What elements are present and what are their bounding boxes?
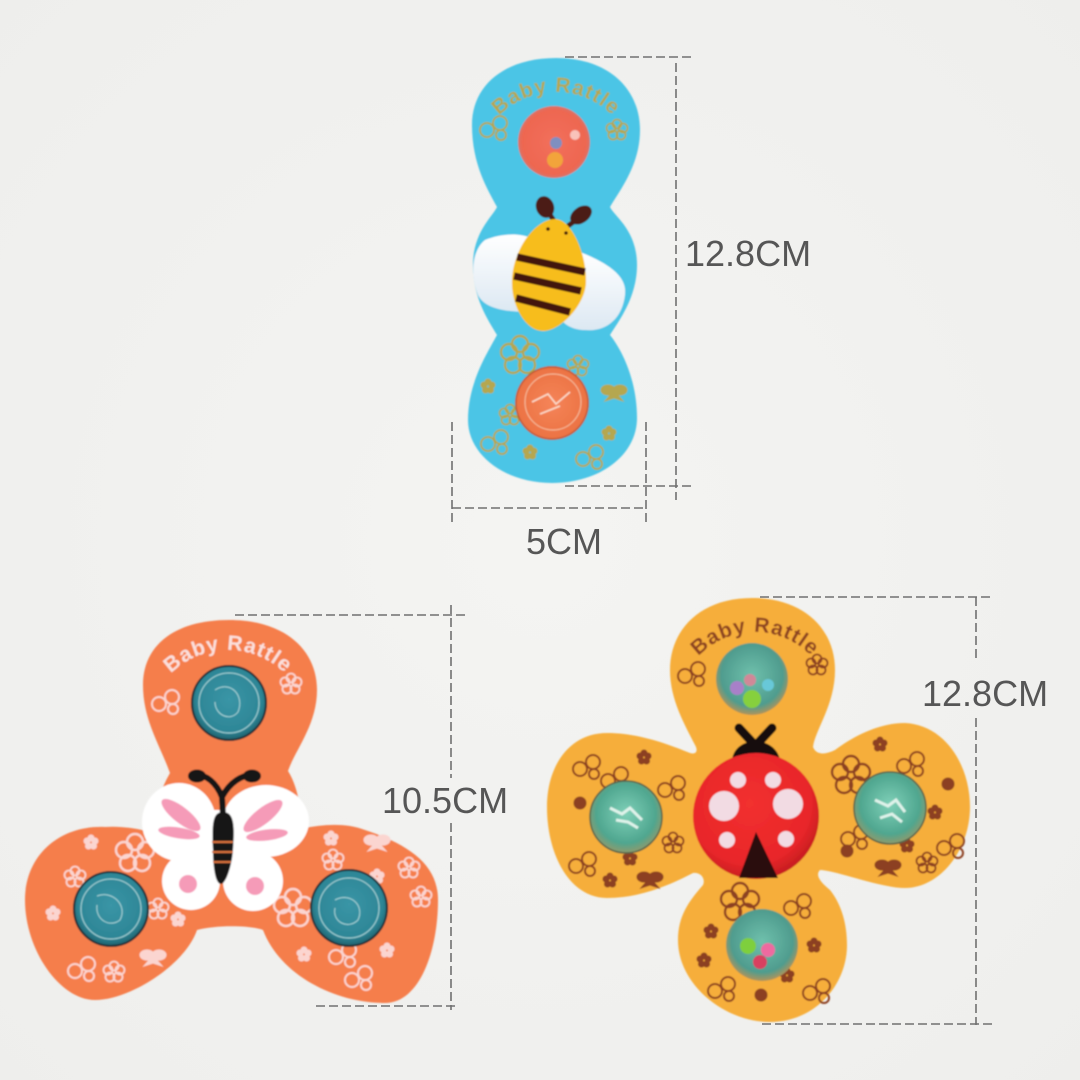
icon: butterfly <box>142 770 309 911</box>
capsule left teal <box>74 872 148 946</box>
dimension: blue height 12.8CM <box>565 57 811 500</box>
dimension: orange height 10.5CM <box>235 605 508 1010</box>
capsule bottom orange <box>515 366 589 440</box>
toy: yellow ladybug spinner <box>546 596 971 1023</box>
pattern: yellow toy flowers <box>569 654 964 1003</box>
capsule top teal <box>192 666 266 740</box>
label: 12.8CM <box>922 673 1048 714</box>
toy: blue bee spinner <box>467 57 641 484</box>
icon: ladybug <box>693 728 819 879</box>
pattern: orange toy flowers <box>46 674 432 990</box>
capsule right teal <box>311 870 387 946</box>
capsule bottom with beads <box>726 909 798 981</box>
icon: bee <box>512 194 595 331</box>
spinner body yellow <box>547 598 970 1022</box>
toy: orange butterfly spinner <box>24 619 439 1004</box>
brand text: Baby Rattle <box>162 634 290 674</box>
spinner body blue <box>468 58 640 483</box>
brand text: Baby Rattle <box>490 76 618 116</box>
pattern: blue toy flowers <box>480 116 628 469</box>
label: 5CM <box>526 521 602 562</box>
label: 12.8CM <box>685 233 811 274</box>
capsule right mint <box>854 772 926 844</box>
capsule top with beads <box>716 643 788 715</box>
capsule left mint <box>590 781 662 853</box>
spinner body orange <box>25 620 438 1003</box>
dimension: yellow height 12.8CM <box>760 597 1048 1025</box>
brand text: Baby Rattle <box>690 616 817 656</box>
label: 10.5CM <box>382 780 508 821</box>
dimension: blue width 5CM <box>452 422 646 562</box>
bee wings <box>473 235 625 330</box>
capsule top red <box>518 106 590 178</box>
